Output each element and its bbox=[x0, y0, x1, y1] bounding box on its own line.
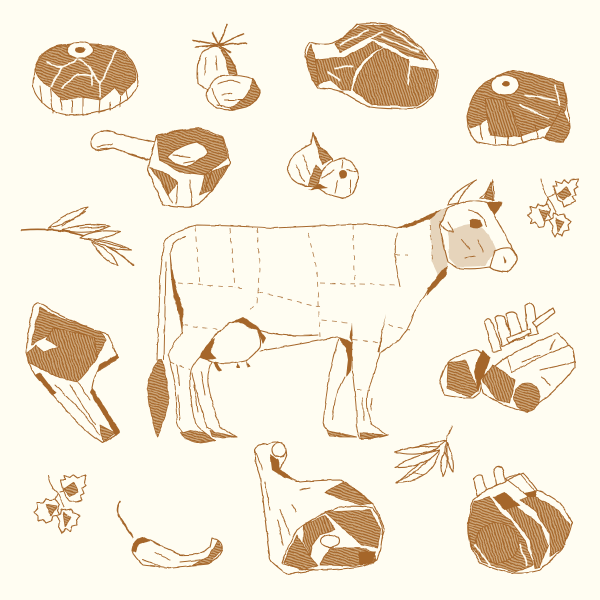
icon: parsley sprig, top right bbox=[527, 179, 578, 237]
icon: rack of ribs, right bbox=[440, 304, 575, 412]
icon: ham leg bbox=[255, 442, 385, 574]
shading on legs and hooves bbox=[170, 253, 388, 443]
icon: chili pepper bbox=[118, 502, 222, 568]
udder bbox=[200, 317, 266, 372]
icon: garlic bbox=[288, 133, 358, 198]
icon: round bone-in steak bbox=[33, 42, 138, 115]
neck and shoulder shading bbox=[395, 208, 447, 296]
icon: rosemary sprig, left bbox=[22, 207, 133, 266]
tail bbox=[148, 230, 185, 437]
icon: crown rib roast bbox=[468, 467, 572, 573]
icon: rib roast bbox=[305, 23, 438, 109]
icon: parsley sprig, bottom left bbox=[34, 475, 86, 533]
butcher dashed cut lines bbox=[170, 215, 433, 390]
cow body outline bbox=[168, 208, 447, 443]
icon: T-bone steak bbox=[467, 70, 570, 145]
cow with butcher cut lines bbox=[148, 180, 517, 443]
head with horns and ear bbox=[440, 180, 517, 272]
icon: rosemary sprig, bottom bbox=[395, 426, 453, 483]
icon: bone-handle chop bbox=[91, 128, 230, 207]
icon: tomatoes bbox=[193, 24, 260, 110]
icon: T-bone chop, left bbox=[26, 303, 120, 443]
